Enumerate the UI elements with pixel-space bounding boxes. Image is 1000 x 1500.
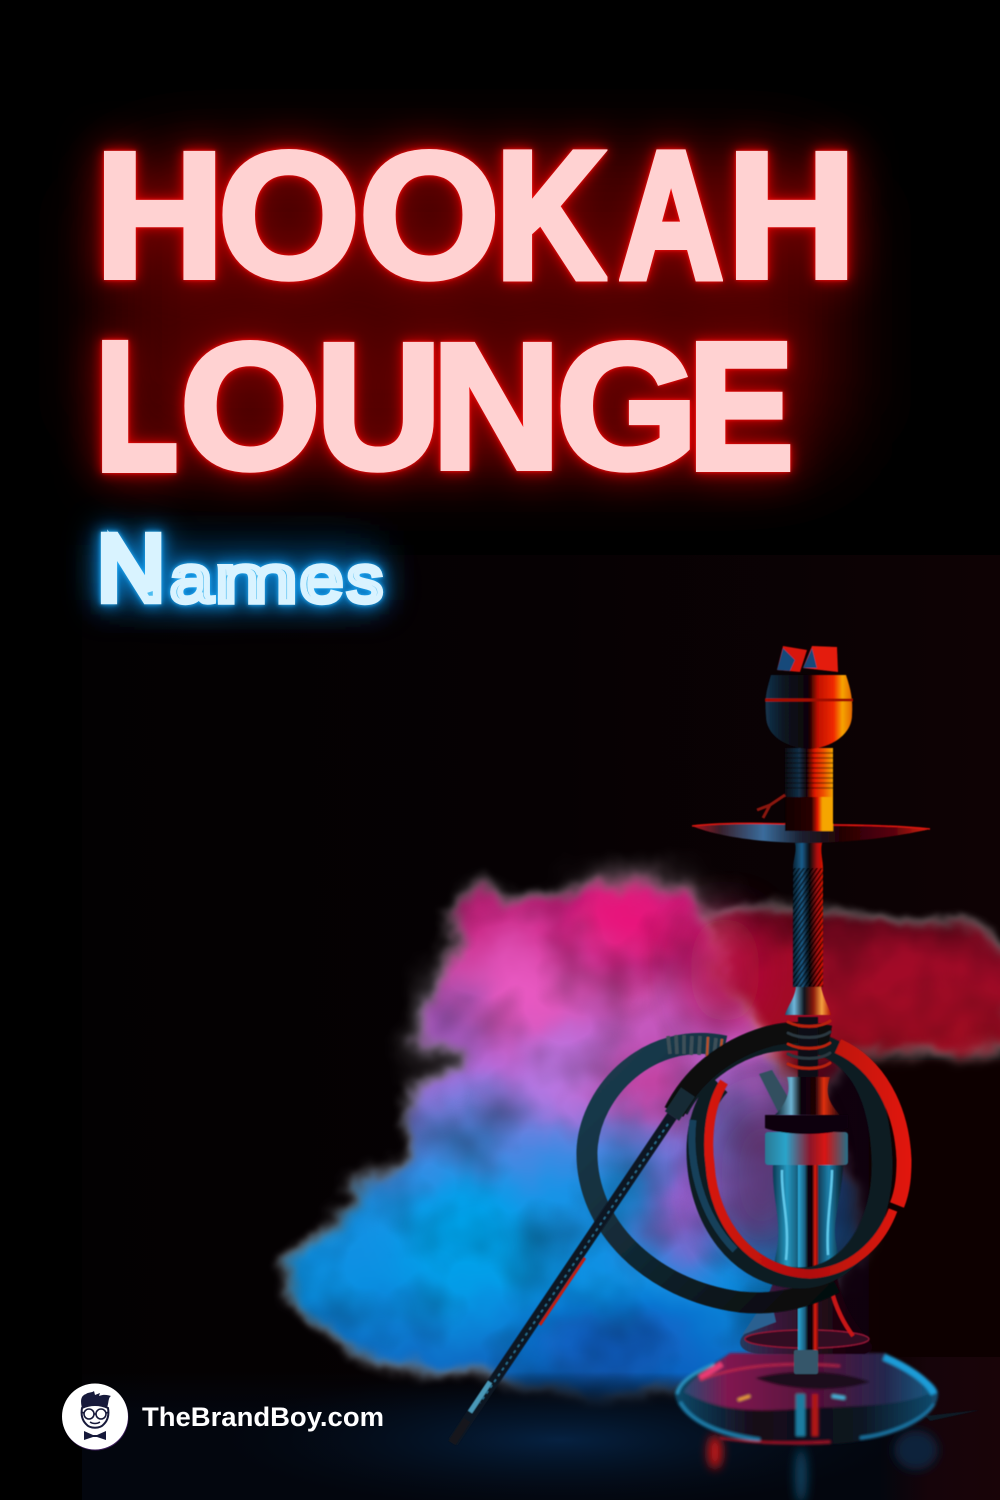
mouthpiece red edge (540, 1258, 585, 1325)
threaded neck (785, 748, 833, 797)
center pipe (798, 1165, 818, 1373)
coal left (777, 646, 807, 672)
hose ring red rim (709, 1082, 893, 1274)
mouthpiece (452, 1092, 688, 1443)
logo text: TheBrandBoy.com (142, 1402, 384, 1432)
title red halo (110, 160, 840, 460)
page: hookah lounge poster: m (215, 542, 298, 617)
smile (90, 1422, 100, 1424)
tray plate (692, 823, 930, 843)
photo backdrop (82, 555, 1000, 1500)
page: hookah lounge poster: O (359, 114, 500, 314)
floor at right (880, 1357, 1000, 1500)
page: hookah lounge poster: L (97, 306, 177, 506)
page: hookah lounge poster: U (316, 306, 441, 506)
logo circle (62, 1384, 128, 1450)
smoke: red to pink transition (690, 915, 760, 1025)
bowl band (765, 698, 853, 702)
page: hookah lounge poster: O (218, 114, 360, 314)
neck threads (785, 753, 833, 788)
hair (81, 1391, 111, 1413)
stem (793, 843, 823, 987)
floor (82, 1357, 1000, 1500)
page: hookah lounge poster: K (497, 114, 604, 314)
smoke: purple left shoulder (426, 990, 470, 1050)
connector (775, 1077, 840, 1115)
hookah lower body (675, 1115, 980, 1500)
subtitle: Names (76, 510, 404, 628)
title line 1: HOOKAH (72, 114, 878, 314)
mouthpiece end (452, 1420, 467, 1443)
vase neck (773, 1165, 843, 1272)
glasses (81, 1409, 109, 1419)
coal right (803, 646, 838, 672)
logo boy (81, 1391, 111, 1440)
face (82, 1405, 108, 1428)
coal right shade (803, 648, 817, 668)
hose ring dark (678, 1040, 882, 1278)
black cap (765, 1115, 848, 1134)
page: hookah lounge poster: e (300, 542, 343, 617)
smoke: main pink to blue cloud (288, 885, 860, 1398)
spring core (798, 1017, 818, 1077)
floor glow (220, 1370, 900, 1500)
tong charm (757, 795, 785, 818)
brand logo (62, 1384, 384, 1450)
floor band (82, 1372, 1000, 1500)
cone inner disc (745, 1330, 869, 1348)
smoke: maroon inside hose ring (714, 1095, 810, 1255)
smoke: magenta behind hose (600, 1050, 700, 1120)
glass collar (765, 1132, 848, 1165)
mouthpiece top ferrule (672, 1092, 688, 1116)
page: hookah lounge poster: H (727, 114, 856, 314)
glass cone (740, 1265, 872, 1354)
coal left shade (777, 648, 795, 671)
title line 2: LOUNGE (71, 306, 815, 506)
bowl head (766, 675, 852, 749)
center pipe foot (794, 1350, 818, 1374)
dark hose top (674, 1033, 830, 1112)
left hose loop (587, 1043, 835, 1303)
page: hookah lounge poster: A (620, 114, 722, 314)
mouthpiece metal tip (470, 1382, 490, 1412)
tray rim (692, 823, 930, 829)
base reflections (708, 1410, 980, 1500)
smoke: lilac core (518, 1040, 638, 1110)
nut (785, 797, 833, 831)
hose ring left blue sheen (692, 1120, 735, 1250)
page: hookah lounge poster: N (432, 306, 561, 506)
page: hookah lounge poster: a (170, 542, 213, 617)
hoses (587, 1033, 904, 1303)
smoke: red plume at right (690, 906, 1000, 1105)
subtitle blue halo (105, 545, 375, 600)
page: hookah lounge poster: N (98, 516, 165, 620)
smoke: fade into dark behind hookah (690, 1060, 1000, 1400)
page: hookah lounge poster: E (689, 306, 793, 506)
side port (759, 1070, 792, 1112)
cone red highlight (830, 1285, 853, 1336)
smoke: violet right (650, 1130, 730, 1270)
vase highlights (782, 1170, 832, 1260)
smoke: hot pink top (565, 893, 705, 957)
spring coils (788, 1021, 830, 1068)
cone left blue facet (742, 1305, 776, 1335)
smoke: deep blue low (530, 1315, 710, 1375)
smoke: bright pink heart (470, 947, 580, 1023)
hookah upper body (692, 646, 930, 1115)
page: hookah lounge poster: O (180, 306, 320, 506)
page: hookah lounge poster: s (347, 542, 383, 617)
page: hookah lounge poster: G (556, 306, 698, 506)
bow tie (84, 1431, 106, 1440)
page: hookah lounge poster: H (95, 114, 224, 314)
mouthpiece blue specks (480, 1124, 668, 1403)
smoke: cyan core (400, 1180, 540, 1300)
spring guard orange lines (707, 1037, 722, 1056)
collar (785, 987, 831, 1015)
spring guard on hose (668, 1035, 722, 1056)
glass base (675, 1353, 938, 1445)
hose ring red outer arc (838, 1046, 904, 1205)
